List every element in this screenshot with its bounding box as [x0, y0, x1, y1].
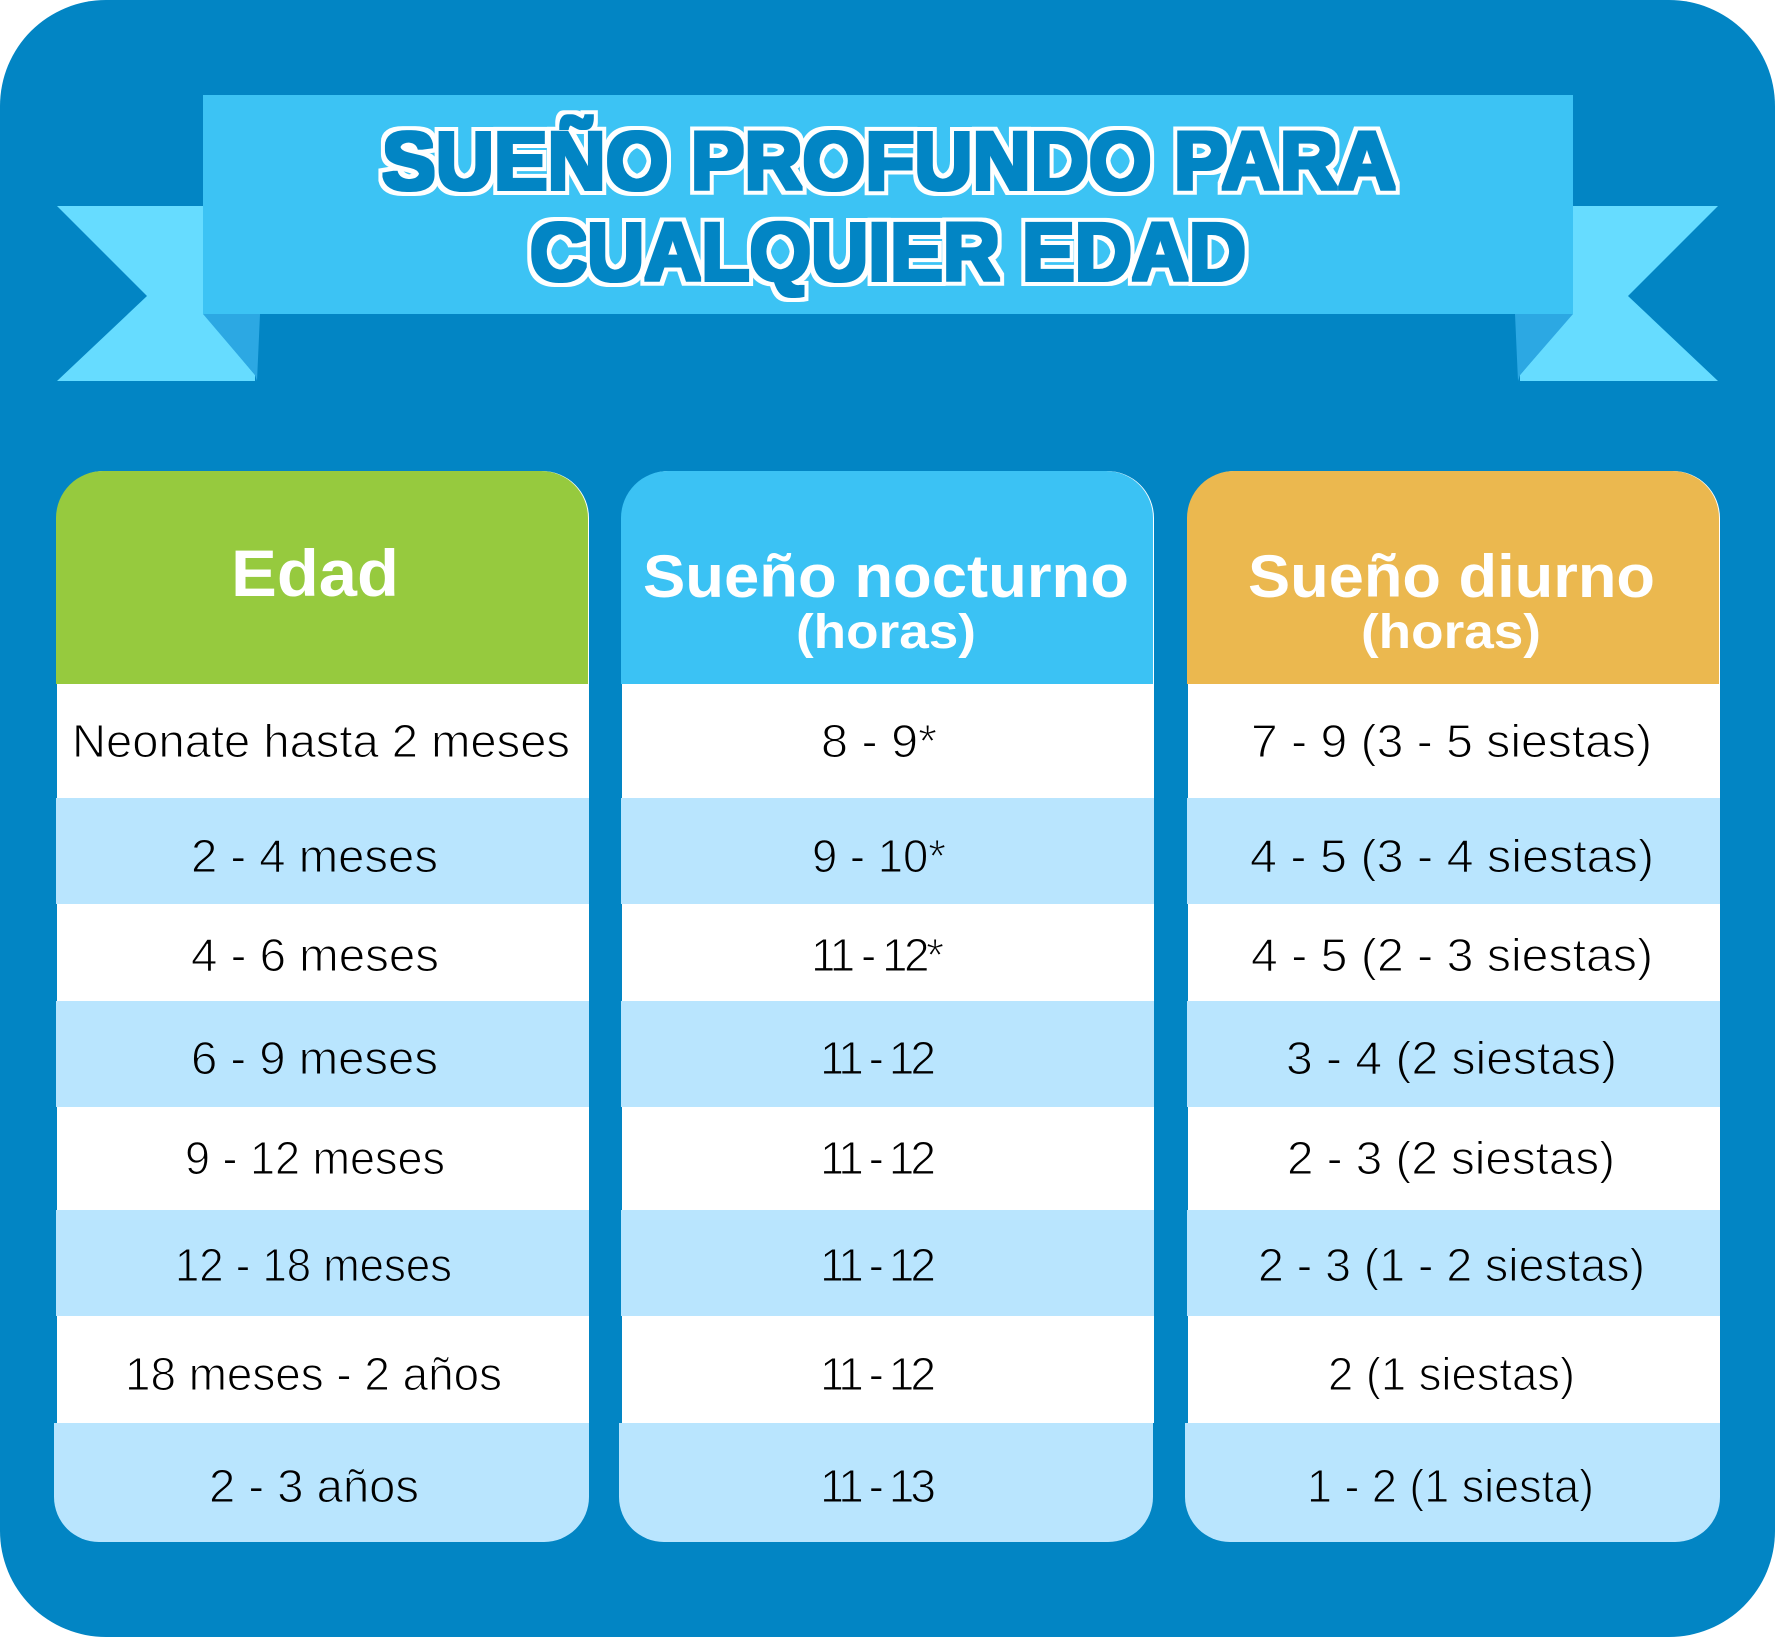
- ribbon band: [203, 95, 1573, 314]
- night sleep values: 11 - 12: [820, 1239, 936, 1291]
- night sleep values: 11 - 12: [820, 1032, 936, 1084]
- header: Edad: Edad: [231, 536, 399, 610]
- night sleep values: 11 - 12*: [811, 929, 944, 981]
- day sleep values: 4 - 5 (2 - 3 siestas): [1251, 929, 1653, 981]
- age values: 2 - 3 años: [209, 1460, 419, 1512]
- header: Sueño diurno: (horas): [1361, 606, 1541, 659]
- header: Sueño nocturno: Sueño nocturno: [643, 543, 1129, 610]
- night sleep values: 11 - 12: [820, 1132, 936, 1184]
- day sleep values: 7 - 9 (3 - 5 siestas): [1251, 715, 1652, 767]
- ribbon right fold: [1515, 314, 1573, 381]
- night sleep values: 8 - 9*: [821, 715, 937, 767]
- panel edge: [1188, 471, 1720, 771]
- ribbon left tail: [57, 206, 255, 381]
- age values: 18 meses - 2 años: [125, 1348, 502, 1400]
- row backgrounds: [619, 684, 1154, 1542]
- panel edge: [622, 471, 1154, 771]
- day sleep values: 2 - 3 (1 - 2 siestas): [1258, 1239, 1645, 1291]
- age values: Neonate hasta 2 meses: [72, 715, 570, 767]
- ribbon left fold: [203, 314, 260, 381]
- panel: Sueño diurno: [1185, 471, 1720, 1542]
- age values: 6 - 9 meses: [191, 1032, 438, 1084]
- header: Edad: [56, 471, 588, 684]
- age values: 9 - 12 meses: [185, 1132, 445, 1184]
- age values: 4 - 6 meses: [191, 929, 439, 981]
- night sleep values: 11 - 12: [820, 1348, 936, 1400]
- day sleep values: 4 - 5 (3 - 4 siestas): [1250, 830, 1654, 882]
- night sleep values: 9 - 10*: [812, 830, 946, 882]
- title: [382, 116, 1396, 298]
- panel: Edad: [54, 471, 589, 1542]
- panel: Sueño nocturno: [619, 471, 1154, 1542]
- night sleep values: [811, 715, 946, 1512]
- row backgrounds: [1185, 684, 1720, 1542]
- day sleep values: [1250, 715, 1654, 1512]
- age values: 2 - 4 meses: [191, 830, 438, 882]
- header: Sueño diurno: Sueño diurno: [1248, 543, 1655, 610]
- row backgrounds: [54, 684, 589, 1542]
- panel edge: [57, 471, 589, 771]
- day sleep values: 2 - 3 (2 siestas): [1287, 1132, 1615, 1184]
- header: Sueño diurno: [1187, 471, 1719, 684]
- ribbon right tail: [1520, 206, 1718, 381]
- night sleep values: 11 - 13: [820, 1460, 936, 1512]
- header: Sueño nocturno: [621, 471, 1153, 684]
- day sleep values: 1 - 2 (1 siesta): [1307, 1460, 1594, 1512]
- age values: [72, 715, 570, 1512]
- day sleep values: 2 (1 siestas): [1328, 1348, 1575, 1400]
- title: CUALQUIER EDAD: [530, 207, 1246, 298]
- title ribbon: [57, 95, 1718, 381]
- day sleep values: 3 - 4 (2 siestas): [1286, 1032, 1617, 1084]
- title: SUEÑO PROFUNDO PARA: [382, 116, 1396, 207]
- header: Sueño nocturno: (horas): [796, 606, 976, 659]
- age values: 12 - 18 meses: [175, 1239, 452, 1291]
